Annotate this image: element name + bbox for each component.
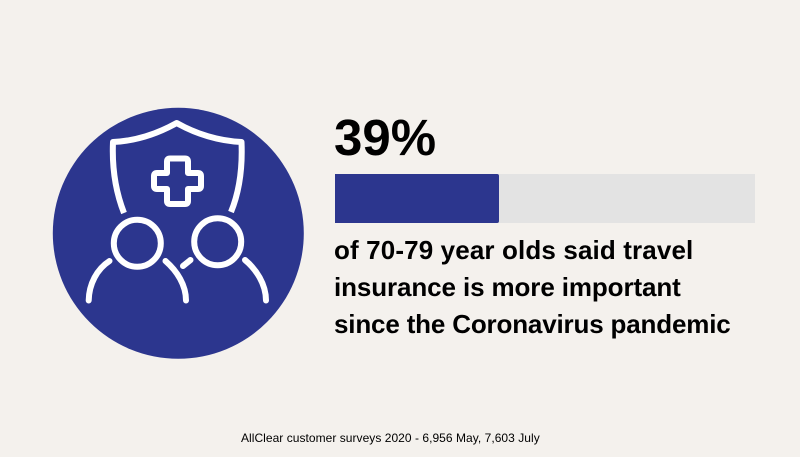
- progress bar: [335, 174, 755, 223]
- description text: insurance is more important: [334, 272, 681, 302]
- description text: [334, 235, 731, 339]
- description text: since the Coronavirus pandemic: [334, 309, 731, 339]
- heading: 39%: 39%: [334, 109, 436, 166]
- description text: of 70-79 year olds said travel: [334, 235, 693, 265]
- icon: shield with cross and two people in a circle: [52, 108, 304, 359]
- progress bar fill: [335, 174, 499, 223]
- source note: AllClear customer surveys 2020 - 6,956 May, 7,603 July: [241, 431, 540, 445]
